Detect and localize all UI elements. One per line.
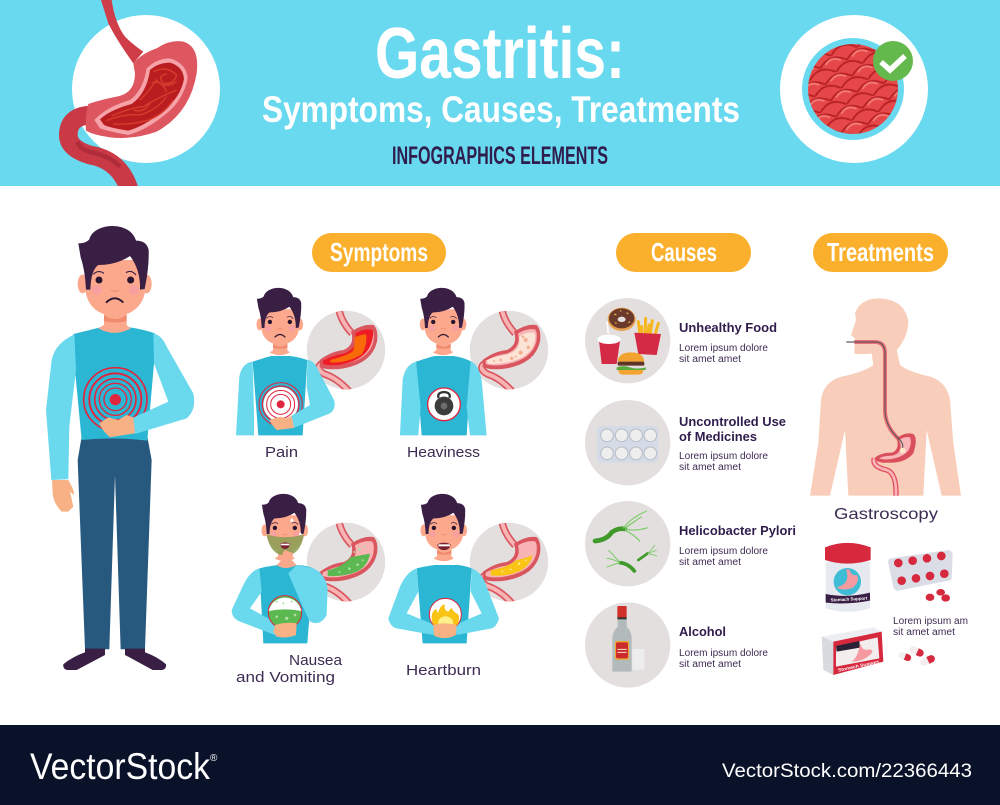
cause: helicobacter pylori: Lorem ipsum dolore <box>679 546 768 557</box>
cause: alcohol <box>585 602 768 688</box>
tagline: INFOGRAPHICS ELEMENTS <box>392 142 608 170</box>
treatment: medicines <box>822 543 968 675</box>
cause: helicobacter pylori <box>585 501 796 586</box>
footer watermark bar: ® <box>210 753 218 764</box>
icon: bacteria <box>585 501 670 586</box>
cause: unhealthy food <box>585 298 777 383</box>
figure: man with kettlebell on stomach <box>400 288 487 435</box>
text: Alcohol <box>679 624 726 639</box>
cause: uncontrolled use of medicines: of Medicines <box>679 429 757 444</box>
heading pill: Causes <box>616 233 751 272</box>
heading pill: Causes: Causes <box>651 237 717 267</box>
icon: fast food <box>585 298 670 383</box>
heading pill: Treatments: Treatments <box>827 237 934 267</box>
treatment: medicines: sit amet amet <box>893 627 955 638</box>
label: and Vomiting <box>236 669 335 686</box>
cause: unhealthy food: sit amet amet <box>679 354 741 365</box>
footer watermark bar: VectorStock.com/22366443 <box>722 761 972 782</box>
label: Heartburn <box>406 662 481 679</box>
label: Gastroscopy <box>834 506 938 523</box>
cause: helicobacter pylori: sit amet amet <box>679 557 741 568</box>
symptom: pain <box>236 288 385 461</box>
heading pill: Treatments <box>813 233 948 272</box>
heading pill: Symptoms: Symptoms <box>330 237 428 267</box>
text: Lorem ipsum am <box>893 616 968 627</box>
stomach inset: inflamed <box>307 308 385 392</box>
stomach inset: acid <box>470 520 548 604</box>
label: Pain <box>265 444 298 461</box>
icon: stomach lining with check mark <box>780 15 928 163</box>
icon: stomach cross-section <box>68 0 220 190</box>
icon: capsules <box>898 645 936 667</box>
heading pill: Symptoms <box>312 233 446 272</box>
footer watermark bar <box>0 725 1000 805</box>
figure: man clutching burning stomach <box>388 494 499 643</box>
footer watermark bar: VectorStock <box>30 746 210 787</box>
text: Unhealthy Food <box>679 320 777 335</box>
figure: man with target on stomach <box>236 288 335 435</box>
stomach inset: green contents <box>307 520 385 604</box>
cause: uncontrolled use of medicines: Lorem ipsum dolore <box>679 451 768 462</box>
cause: unhealthy food: Lorem ipsum dolore <box>679 343 768 354</box>
cause: uncontrolled use of medicines <box>585 400 786 485</box>
main figure: man with stomach pain <box>46 226 194 670</box>
label: Nausea <box>289 652 343 669</box>
title: Gastritis: <box>375 14 625 94</box>
cause: alcohol: sit amet amet <box>679 659 741 670</box>
figure: man covering mouth <box>232 494 328 643</box>
treatment: gastroscopy diagram <box>810 298 961 523</box>
icon: supplement jar: Stomach Support <box>831 596 868 603</box>
label <box>236 652 343 686</box>
text: Helicobacter Pylori <box>679 523 796 538</box>
subtitle: Symptoms, Causes, Treatments <box>262 89 740 130</box>
icon: blister pack <box>585 400 670 485</box>
symptom: nausea and vomiting <box>232 494 385 686</box>
cause: alcohol: Lorem ipsum dolore <box>679 648 768 659</box>
cause: uncontrolled use of medicines: sit amet amet <box>679 462 741 473</box>
icon: medicine box: Stomach Support <box>837 659 880 673</box>
icon: bottle and glass <box>585 602 670 688</box>
label: Heaviness <box>407 444 480 461</box>
stomach inset: bloated <box>470 308 548 392</box>
text: Uncontrolled Use <box>679 414 786 429</box>
icon: red tablet blister <box>888 550 953 602</box>
symptom: heartburn <box>388 494 548 679</box>
header band <box>0 0 1000 190</box>
symptom: heaviness <box>400 288 548 461</box>
